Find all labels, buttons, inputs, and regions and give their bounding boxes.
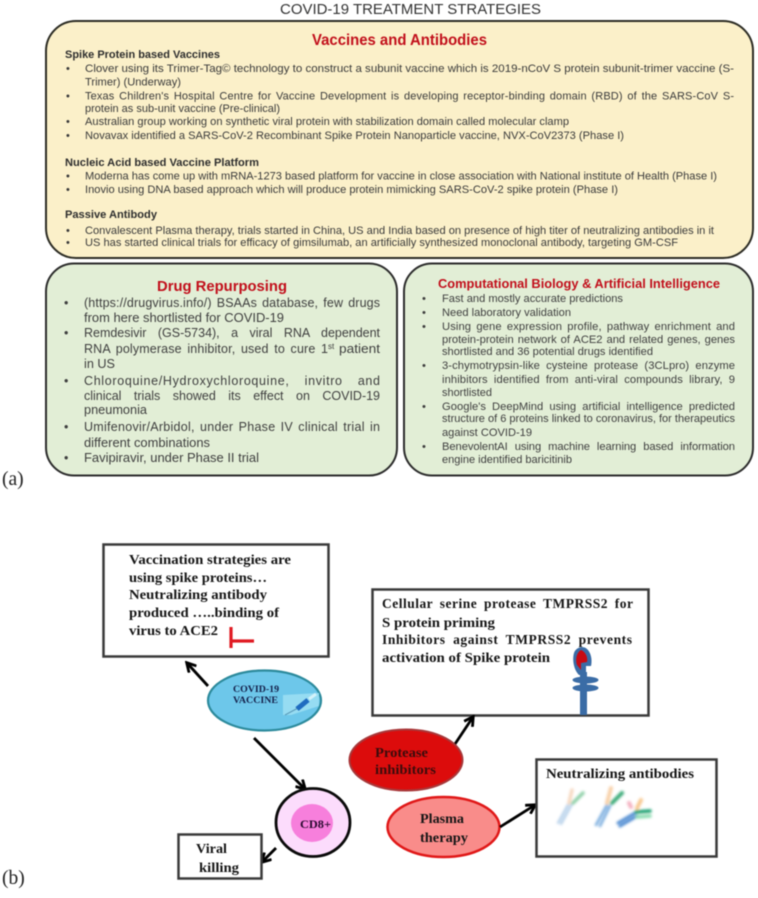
list: computational biology items: Google's DeepMind using artificial intelligence predicted [442, 401, 735, 413]
section: passive antibody: Passive Antibody [65, 209, 158, 221]
section: nucleic acid based vaccine platform [65, 157, 717, 196]
section: spike protein based vaccines: Texas Children's Hospital Centre for Vaccine Development is developing receptor-binding domain (RBD) of the SARS-CoV S- [85, 90, 734, 102]
section: spike protein based vaccines: Spike Protein based Vaccines [65, 49, 220, 61]
panel: computational biology and artificial intelligence [404, 264, 753, 476]
list: drug repurposing items: patient [339, 342, 381, 356]
ellipse: covid-19 vaccine [208, 670, 321, 730]
arrow: CD8+ to viral killing [262, 848, 276, 862]
section: nucleic acid based vaccine platform: Inovio using DNA based approach which will produce protein mimicking SARS-CoV-2 spike protein (Phase I) [85, 184, 618, 196]
arrow: plasma therapy to neutralizing antibodies [500, 805, 535, 827]
ellipse: protease inhibitors [350, 730, 462, 790]
ellipse: covid-19 vaccine: COVID-19 [233, 684, 280, 694]
label: (a): (a) [2, 469, 24, 490]
box: vaccination strategies: produced …..binding of [129, 605, 280, 620]
panel heading: computational biology and AI: Computational Biology & Artificial Intelligence [438, 277, 720, 291]
list: computational biology items: protein-protein network of ACE2 and related genes, genes [442, 334, 735, 346]
arrow: vaccine to vaccination strategies [187, 663, 208, 686]
section: nucleic acid based vaccine platform: Nucleic Acid based Vaccine Platform [65, 157, 259, 169]
section: spike protein based vaccines: • [66, 116, 70, 128]
list: drug repurposing items: in US [84, 357, 115, 371]
list: computational biology items: 3-chymotrypsin-like cysteine protease (3CLpro) enzyme [442, 360, 735, 372]
section: nucleic acid based vaccine platform: • [66, 184, 70, 196]
section: passive antibody: • [66, 237, 70, 249]
list: drug repurposing items: Favipiravir, under Phase II trial [84, 451, 259, 465]
arrow: vaccine to CD8+ [254, 738, 305, 789]
list: drug repurposing items: Umifenovir/Arbidol, under Phase IV clinical trial in [84, 420, 380, 434]
section: passive antibody: • [66, 225, 70, 237]
box: TMPRSS2 protease: activation of Spike protein [382, 650, 551, 665]
box: TMPRSS2 protease: Cellular serine protease TMPRSS2 for [382, 596, 633, 611]
box: vaccination strategies: Neutralizing antibody [129, 587, 267, 602]
icon: TMPRSS2 receptor [572, 647, 598, 715]
cell: CD8+ [276, 788, 350, 856]
list: drug repurposing items: pneumonia [84, 403, 147, 417]
list: computational biology items: structure of 6 proteins linked to coronavirus, for therapeutics [442, 413, 735, 425]
box: viral killing [178, 834, 262, 878]
ellipse: plasma therapy: therapy [420, 830, 468, 845]
list: computational biology items: engine identified baricitinib [442, 454, 572, 466]
section: spike protein based vaccines [65, 49, 734, 142]
box: viral killing: killing [199, 860, 239, 875]
label: (b): (b) [2, 868, 25, 889]
arrow: protease inhibitors to TMPRSS2 box [455, 717, 473, 744]
list: drug repurposing items: different combinations [84, 436, 210, 450]
icon: antibody structures [558, 788, 650, 826]
list: computational biology items: BenevolentAI using machine learning based information [442, 441, 735, 453]
section: passive antibody: Convalescent Plasma therapy, trials started in China, US and India based on presence of high titer of neutralizing antibodies in it [85, 225, 714, 237]
box: TMPRSS2 protease: Inhibitors against TMPRSS2 prevents [382, 632, 632, 647]
list: drug repurposing items: Chloroquine/Hydroxychloroquine, invitro and [84, 374, 380, 388]
ellipse: protease inhibitors: inhibitors [375, 762, 436, 777]
list: computational biology items: Fast and mostly accurate predictions [442, 293, 623, 305]
section: spike protein based vaccines: • [66, 130, 70, 142]
list: drug repurposing items: (https://drugvirus.info/) BSAAs database, few drugs [84, 296, 380, 310]
list: computational biology items: inhibitors identified from anti-viral compounds library, 9 [442, 374, 735, 386]
list: computational biology items: shortlisted [442, 387, 492, 399]
box: neutralizing antibodies [536, 760, 716, 856]
box: viral killing: Viral [196, 841, 227, 856]
box: TMPRSS2 protease [372, 590, 648, 716]
section: passive antibody: US has started clinical trials for efficacy of gimsilumab, an artificially synthesized monoclonal antibody, targeting GM-CSF [85, 237, 678, 249]
panel heading: vaccines and antibodies: Vaccines and Antibodies [312, 32, 487, 49]
list: computational biology items: • [422, 360, 426, 372]
box: vaccination strategies [104, 544, 328, 656]
list: computational biology items: • [422, 321, 426, 333]
box: neutralizing antibodies: Neutralizing antibodies [546, 766, 694, 781]
list: drug repurposing items: from here shortlisted for COVID-19 [84, 311, 284, 325]
icon: syringe [283, 693, 319, 715]
list: computational biology items: • [422, 307, 426, 319]
icon: red inhibition bar [231, 627, 254, 648]
list: computational biology items: against COVID-19 [442, 427, 532, 439]
list: drug repurposing items: clinical trials showed its effect on COVID-19 [84, 389, 380, 403]
list: drug repurposing items [64, 296, 381, 465]
section: spike protein based vaccines: Australian group working on synthetic viral protein with stabilization domain called molecular clamp [85, 116, 569, 128]
box: vaccination strategies: Vaccination strategies are [129, 552, 291, 567]
cell: CD8+: CD8+ [300, 819, 331, 831]
section: passive antibody [65, 209, 714, 249]
box: vaccination strategies: virus to ACE2 [129, 623, 218, 638]
box: TMPRSS2 protease: S protein priming [382, 615, 495, 630]
section: nucleic acid based vaccine platform: • [66, 170, 70, 182]
section: spike protein based vaccines: • [66, 90, 70, 102]
list: computational biology items: Using gene expression profile, pathway enrichment and [442, 321, 735, 333]
section: spike protein based vaccines: • [66, 63, 70, 75]
section: spike protein based vaccines: Clover using its Trimer-Tag© technology to construct a subunit vaccine which is 2019-nCoV S protein subunit-trimer vaccine (S- [85, 63, 734, 75]
section: spike protein based vaccines: Novavax identified a SARS-CoV-2 Recombinant Spike Protein Nanoparticle vaccine, NVX-CoV2373 (Phase I) [85, 130, 624, 142]
list: computational biology items: • [422, 441, 426, 453]
list: drug repurposing items: st [328, 342, 335, 351]
title: COVID-19 TREATMENT STRATEGIES [280, 2, 541, 18]
list: drug repurposing items: • [64, 326, 68, 340]
ellipse: protease inhibitors: Protease [375, 745, 428, 760]
list: computational biology items: shortlisted and 36 potential drugs identified [442, 346, 653, 358]
list: drug repurposing items: RNA polymerase inhibitor, used to cure 1 [84, 342, 328, 356]
section: spike protein based vaccines: Trimer) (Underway) [85, 76, 181, 88]
list: computational biology items: • [422, 401, 426, 413]
list: computational biology items: • [422, 293, 426, 305]
cell nucleus [291, 804, 333, 842]
section: nucleic acid based vaccine platform: Moderna has come up with mRNA-1273 based platform for vaccine in close association with National institute of Health (Phase I) [85, 170, 717, 182]
section: spike protein based vaccines: protein as sub-unit vaccine (Pre-clinical) [85, 103, 280, 115]
panel: vaccines and antibodies [46, 21, 753, 258]
list: drug repurposing items: Remdesivir (GS-5734), a viral RNA dependent [84, 326, 381, 340]
list: drug repurposing items: • [64, 374, 68, 388]
list: computational biology items: Need laboratory validation [442, 307, 571, 319]
ellipse: plasma therapy [388, 797, 500, 857]
list: computational biology items [422, 293, 735, 466]
ellipse: plasma therapy: Plasma [420, 811, 464, 826]
list: drug repurposing items: • [64, 420, 68, 434]
list: drug repurposing items: • [64, 296, 68, 310]
panel heading: drug repurposing: Drug Repurposing [157, 278, 287, 295]
box: vaccination strategies: using spike proteins… [129, 570, 267, 585]
ellipse: covid-19 vaccine: VACCINE [233, 695, 278, 705]
list: drug repurposing items: • [64, 451, 68, 465]
panel: drug repurposing [46, 264, 397, 476]
